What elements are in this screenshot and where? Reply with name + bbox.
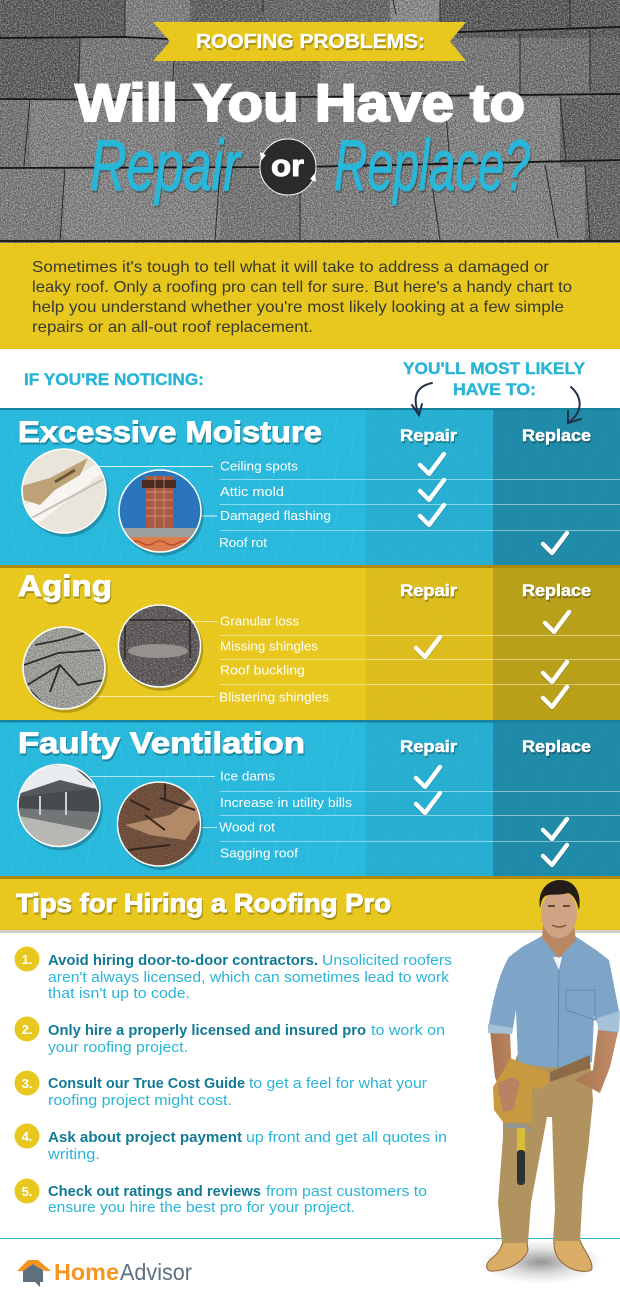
tip 5: from past customers to — [266, 1184, 427, 1200]
row labels: Ice dams — [220, 770, 275, 784]
chart header: you'll most likely have to: HAVE TO: — [453, 381, 536, 399]
photo: wood rot — [115, 780, 205, 870]
tip 1: aren't always licensed, which can sometimes lead to work — [48, 970, 450, 986]
neck and head — [540, 880, 580, 958]
photo: granular loss — [115, 602, 205, 692]
tip 2: Only hire a properly licensed and insured pro — [48, 1023, 366, 1039]
tool belt and pouch — [493, 1055, 590, 1122]
arrow: to repair column — [412, 383, 432, 415]
row labels: Ceiling spots — [220, 460, 298, 474]
tip 3: roofing project might cost. — [48, 1093, 232, 1109]
tip 4: 4. — [22, 1129, 32, 1144]
row labels: Increase in utility bills — [220, 796, 352, 810]
banner: roofing problems — [153, 22, 466, 61]
column labels — [400, 581, 591, 600]
column labels: Repair — [400, 426, 457, 445]
row dividers and leader lines — [95, 622, 620, 696]
tips heading band — [0, 876, 620, 933]
tip 2 — [14, 1016, 445, 1056]
check marks — [416, 767, 567, 865]
heading: aging: Aging — [18, 570, 112, 603]
tip 5: ensure you hire the best pro for your project. — [48, 1200, 355, 1216]
forearms — [490, 1030, 618, 1112]
row labels: Blistering shingles — [219, 690, 329, 704]
tip 3: 3. — [22, 1076, 32, 1091]
column labels: Replace — [522, 737, 591, 756]
ground shadow — [479, 1240, 603, 1284]
row labels — [219, 770, 352, 860]
arrow: to replace column — [568, 387, 581, 423]
section: aging — [0, 565, 620, 720]
tip 1: Avoid hiring door-to-door contractors. — [48, 953, 318, 969]
row labels: Missing shingles — [220, 640, 318, 654]
denim shirt — [488, 936, 620, 1068]
trousers — [498, 1055, 593, 1243]
logo: homeadvisor: Advisor — [120, 1259, 192, 1285]
row dividers and leader lines — [90, 776, 620, 842]
row labels: Roof buckling — [220, 664, 305, 678]
intro band — [0, 243, 620, 349]
row labels — [219, 460, 331, 550]
logo: homeadvisor — [17, 1259, 192, 1287]
chart header: you'll most likely have to: YOU'LL MOST LIKELY — [403, 360, 585, 378]
logo: homeadvisor: Home — [54, 1259, 119, 1285]
row dividers and leader lines — [98, 466, 620, 530]
photo: ice dams — [15, 762, 105, 852]
tip 2: to work on — [371, 1023, 445, 1039]
column labels: Replace — [522, 581, 591, 600]
tips heading band: Tips for Hiring a Roofing Pro — [16, 888, 391, 918]
heading: faulty ventilation: Faulty Ventilation — [18, 727, 305, 760]
title: will you have to: Will You Have to — [75, 74, 525, 133]
row labels: Sagging roof — [220, 846, 299, 860]
column labels — [400, 737, 591, 756]
tip 5: 5. — [22, 1184, 32, 1199]
boots — [487, 1240, 592, 1271]
badge: or — [260, 139, 316, 195]
section: excessive moisture — [0, 408, 620, 565]
tip 4: up front and get all quotes in — [246, 1130, 447, 1146]
intro band: repairs or an all-out roof replacement. — [32, 319, 313, 336]
photo: ceiling spots — [20, 448, 110, 538]
tip 2: 2. — [22, 1022, 32, 1037]
photo: chimney flashing — [118, 470, 202, 555]
intro band: leaky roof. Only a roofing pro can tell for sure. But here's a handy chart to — [32, 279, 572, 296]
section: faulty ventilation — [0, 720, 620, 876]
tip 3: Consult our True Cost Guide — [48, 1076, 245, 1092]
row labels: Roof rot — [219, 536, 268, 550]
illustration: roofing pro — [479, 880, 620, 1284]
check marks — [420, 454, 567, 553]
chart header: if you're noticing: IF YOU'RE NOTICING: — [24, 371, 204, 389]
footer rule — [0, 1238, 620, 1239]
column labels: Repair — [400, 737, 457, 756]
tip 3 — [14, 1070, 427, 1109]
tip 1: that isn't up to code. — [48, 986, 190, 1002]
hammer — [505, 1124, 535, 1185]
column labels — [400, 426, 591, 445]
tip 5: Check out ratings and reviews — [48, 1184, 261, 1200]
banner: roofing problems: ROOFING PROBLEMS: — [196, 30, 425, 53]
photo: cracked shingles — [20, 625, 110, 715]
row labels — [219, 614, 329, 704]
tip 1: 1. — [22, 952, 32, 967]
row labels: Granular loss — [220, 614, 299, 628]
tip 5 — [14, 1178, 427, 1216]
tip 2: your roofing project. — [48, 1040, 188, 1056]
heading: excessive moisture: Excessive Moisture — [18, 416, 322, 449]
column labels: Repair — [400, 581, 457, 600]
tip 4: writing. — [47, 1147, 100, 1163]
row labels: Wood rot — [219, 820, 276, 834]
title: repair: Repair — [90, 127, 242, 206]
row labels: Damaged flashing — [220, 509, 331, 523]
check marks — [416, 612, 569, 707]
tip 1: Unsolicited roofers — [322, 953, 452, 969]
intro band: help you understand whether you're most likely looking at a few simple — [32, 299, 564, 316]
tip 4 — [14, 1124, 447, 1163]
tip 1 — [14, 946, 452, 1002]
badge: or: or — [271, 148, 304, 183]
header: roof shingle photo background — [0, 0, 620, 243]
tip 4: Ask about project payment — [48, 1130, 242, 1146]
row labels: Attic mold — [220, 485, 284, 499]
chart header: you'll most likely have to — [403, 360, 585, 399]
tip 3: to get a feel for what your — [249, 1076, 427, 1092]
column labels: Replace — [522, 426, 591, 445]
intro band: Sometimes it's tough to tell what it will take to address a damaged or — [32, 259, 549, 276]
